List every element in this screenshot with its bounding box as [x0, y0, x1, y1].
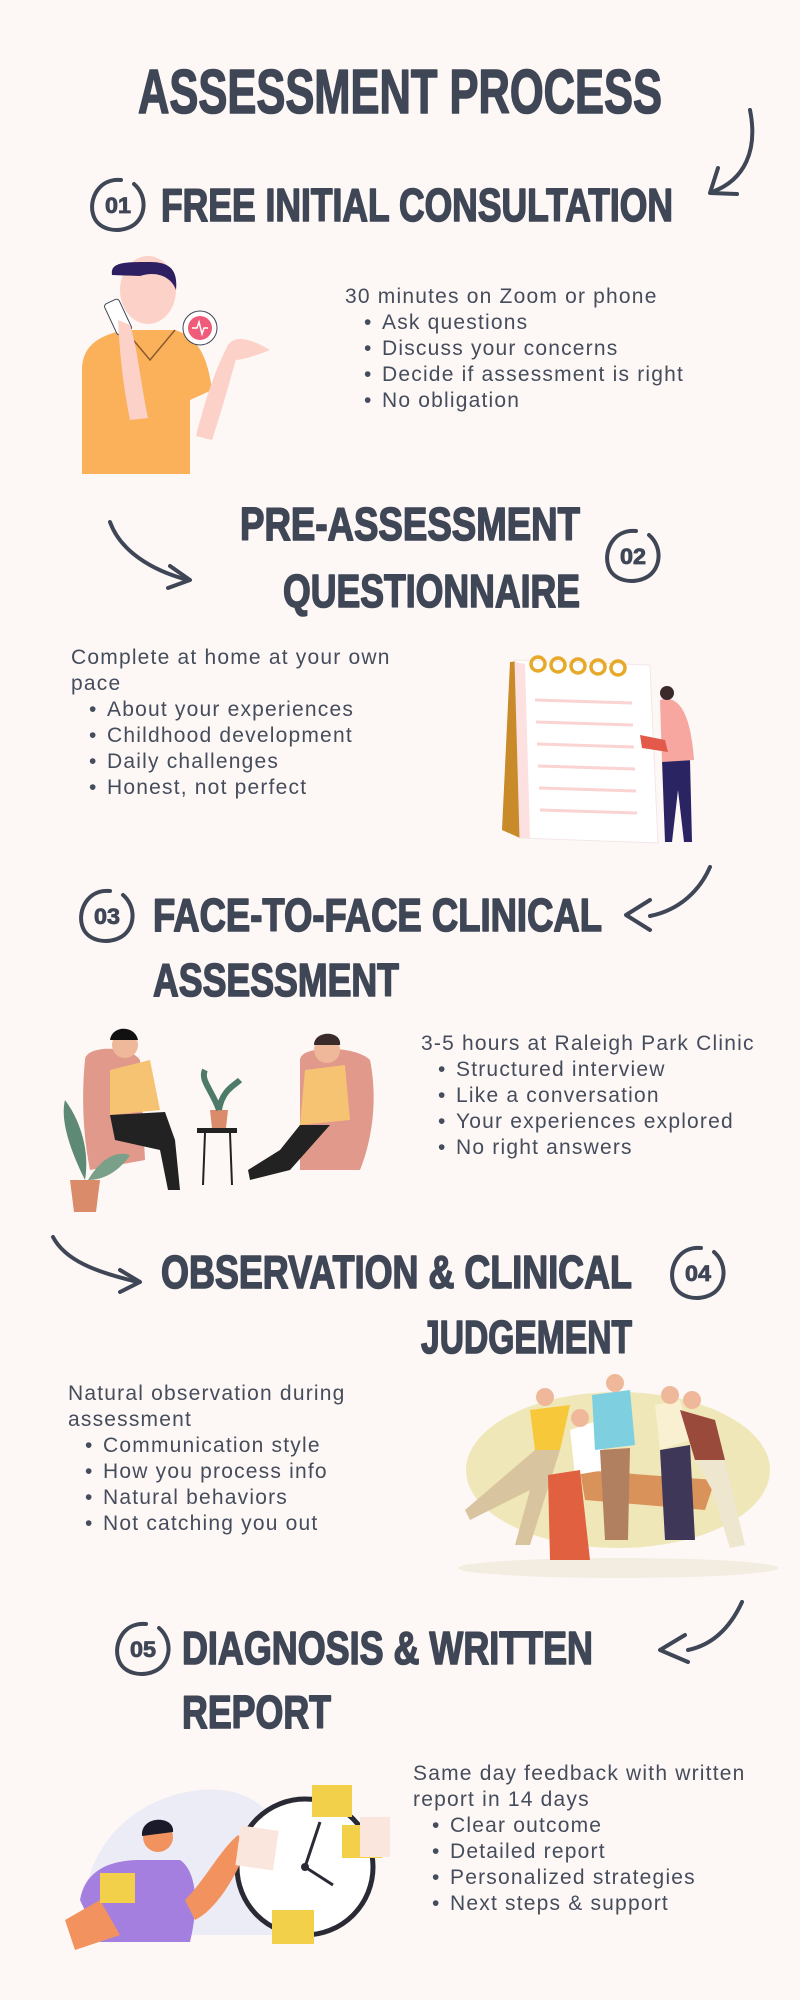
- text block 4: Natural behaviors: [103, 1486, 288, 1509]
- text block 2: About your experiences: [107, 698, 354, 721]
- text block 4: Communication style: [103, 1434, 321, 1457]
- text block 2: Childhood development: [107, 724, 353, 747]
- text block 2: [71, 646, 391, 799]
- arrow: step 1 to step 2: [110, 522, 190, 588]
- number badge 01: [92, 180, 144, 230]
- text block 3: No right answers: [456, 1136, 633, 1159]
- text block 5: report in 14 days: [413, 1788, 590, 1811]
- arrow: title to step 1: [710, 110, 752, 194]
- text block 4: [68, 1382, 346, 1535]
- text block 4: •: [85, 1512, 94, 1535]
- illustration: team huddle around table: [458, 1374, 778, 1578]
- text block 3: 3-5 hours at Raleigh Park Clinic: [421, 1032, 755, 1055]
- text block 3: Structured interview: [456, 1058, 666, 1081]
- illustration: woman with clock and folders: [65, 1785, 390, 1950]
- text block 5: [413, 1762, 745, 1915]
- step 4 heading: JUDGEMENT: [421, 1311, 632, 1363]
- text block 2: •: [89, 724, 98, 747]
- text block 1: [345, 285, 684, 412]
- text block 1: •: [364, 389, 373, 412]
- number badge 02: 02: [620, 544, 646, 569]
- arrow: step 3 to step 4: [53, 1237, 140, 1292]
- illustration: notepad and person: [502, 657, 694, 843]
- text block 3: •: [438, 1110, 447, 1133]
- text block 2: •: [89, 698, 98, 721]
- text block 1: No obligation: [382, 389, 520, 412]
- text block 3: •: [438, 1084, 447, 1107]
- text block 1: Decide if assessment is right: [382, 363, 684, 386]
- number badge 03: 03: [94, 904, 120, 929]
- text block 1: Ask questions: [382, 311, 528, 334]
- text block 3: Your experiences explored: [456, 1110, 734, 1133]
- text block 2: Honest, not perfect: [107, 776, 307, 799]
- step 2 heading: [240, 498, 659, 617]
- step 2 heading: QUESTIONNAIRE: [283, 565, 580, 617]
- text block 1: •: [364, 311, 373, 334]
- number badge 04: 04: [685, 1261, 712, 1286]
- text block 5: Next steps & support: [450, 1892, 669, 1915]
- text block 4: assessment: [68, 1408, 192, 1431]
- arrow: step 2 to step 3: [626, 867, 710, 930]
- text block 3: •: [438, 1136, 447, 1159]
- text block 1: •: [364, 337, 373, 360]
- text block 5: •: [432, 1814, 441, 1837]
- step 5 heading: REPORT: [182, 1686, 331, 1738]
- number badge 05: [117, 1624, 169, 1674]
- text block 5: Detailed report: [450, 1840, 606, 1863]
- number badge 01: 01: [105, 193, 131, 218]
- text block 5: Personalized strategies: [450, 1866, 696, 1889]
- number badge 04: [672, 1248, 724, 1298]
- text block 3: Like a conversation: [456, 1084, 660, 1107]
- step 4 heading: [161, 1246, 724, 1363]
- text block 5: •: [432, 1866, 441, 1889]
- text block 2: pace: [71, 672, 121, 695]
- text block 2: •: [89, 750, 98, 773]
- text block 4: •: [85, 1434, 94, 1457]
- text block 4: Not catching you out: [103, 1512, 318, 1535]
- arrow: step 4 to step 5: [660, 1602, 742, 1662]
- step 3 heading: [81, 889, 602, 1006]
- illustration: two people talking in armchairs: [64, 1029, 374, 1212]
- step 3 heading: FACE-TO-FACE CLINICAL: [153, 889, 602, 941]
- text block 1: Discuss your concerns: [382, 337, 618, 360]
- text block 5: Same day feedback with written: [413, 1762, 745, 1785]
- text block 4: Natural observation during: [68, 1382, 346, 1405]
- step 2 heading: PRE-ASSESSMENT: [240, 498, 580, 550]
- number badge 02: [607, 531, 659, 581]
- number badge 03: [81, 891, 133, 941]
- number badge 05: 05: [130, 1637, 156, 1662]
- illustration: person on phone: [82, 256, 270, 474]
- text block 1: 30 minutes on Zoom or phone: [345, 285, 658, 308]
- text block 5: Clear outcome: [450, 1814, 602, 1837]
- step 4 heading: OBSERVATION & CLINICAL: [161, 1246, 632, 1298]
- text block 5: •: [432, 1892, 441, 1915]
- text block 3: •: [438, 1058, 447, 1081]
- text block 2: Complete at home at your own: [71, 646, 391, 669]
- text block 5: •: [432, 1840, 441, 1863]
- text block 2: •: [89, 776, 98, 799]
- text block 1: •: [364, 363, 373, 386]
- text block 4: How you process info: [103, 1460, 328, 1483]
- step 5 heading: [117, 1622, 593, 1738]
- step 3 heading: ASSESSMENT: [153, 954, 399, 1006]
- text block 4: •: [85, 1486, 94, 1509]
- text block 4: •: [85, 1460, 94, 1483]
- step 5 heading: DIAGNOSIS & WRITTEN: [182, 1622, 593, 1674]
- text block 3: [421, 1032, 755, 1159]
- text block 2: Daily challenges: [107, 750, 279, 773]
